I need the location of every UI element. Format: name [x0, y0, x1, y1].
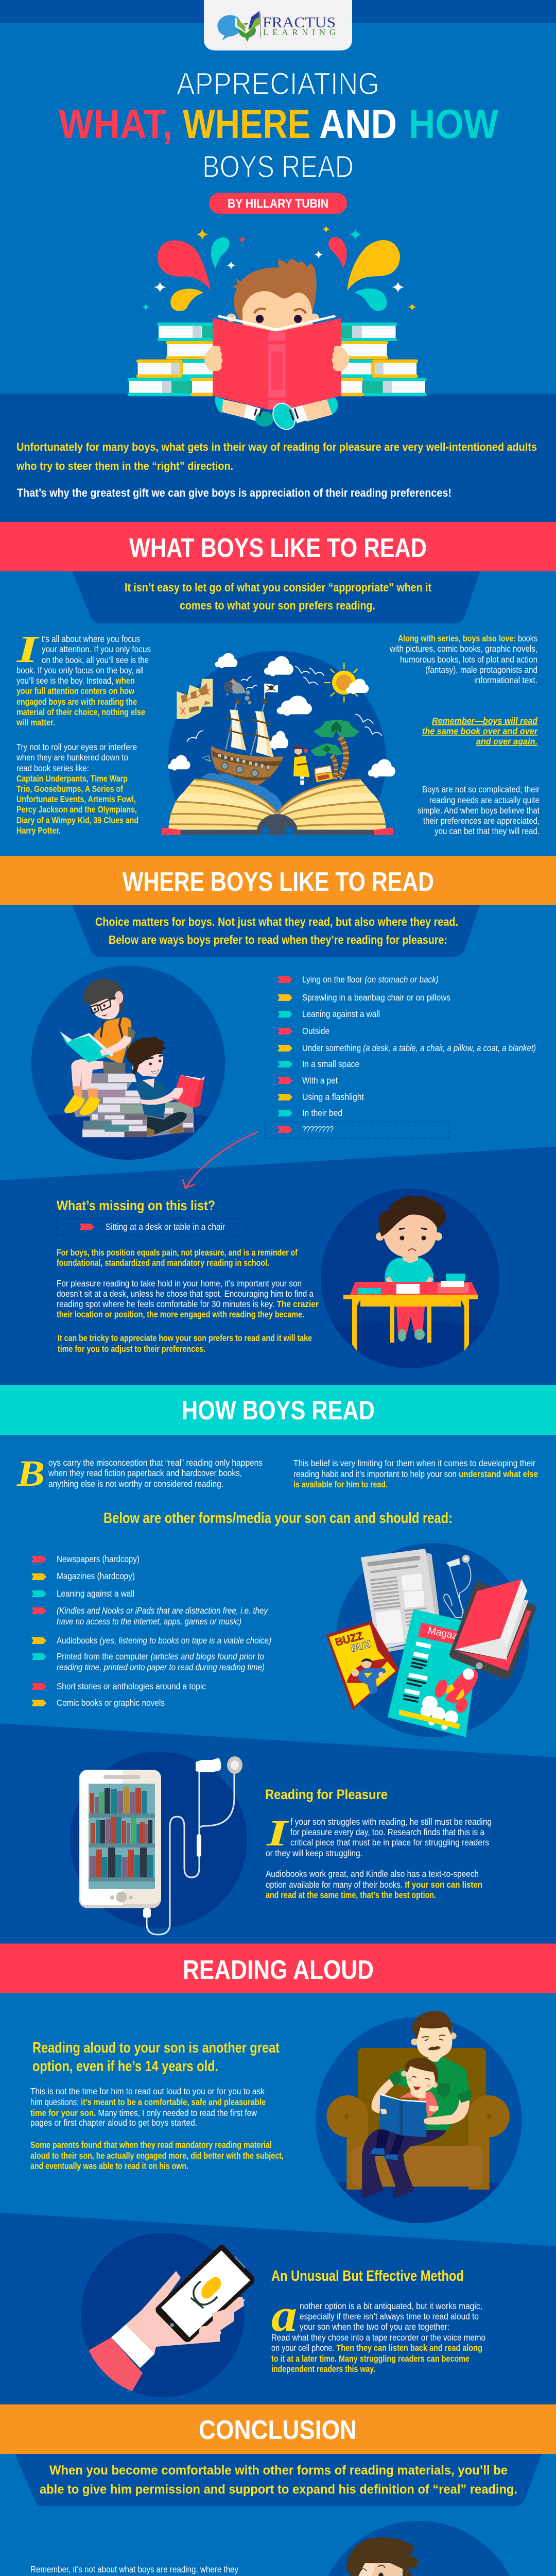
- text block: left column: your attention. If you only focus: [42, 644, 151, 654]
- title: APPRECIATING: [177, 66, 379, 101]
- panel: where boys like to read: [0, 856, 556, 1399]
- title: [59, 66, 498, 184]
- text block: what's missing on this list: reading spot where he feels comfortable for 30 minutes is key. The crazier: [57, 1299, 319, 1309]
- subheading: Below are other forms/media your son can and should read:: [103, 1510, 453, 1527]
- callout: [15, 2454, 542, 2506]
- heading: where boys like to read: WHERE BOYS LIKE TO READ: [123, 867, 434, 897]
- text block: left column: Captain Underpants, Time Warp: [16, 773, 128, 784]
- list: forms of media: Comic books or graphic novels: [57, 1698, 165, 1708]
- heading: reading aloud: READING ALOUD: [183, 1955, 374, 1985]
- list: reading positions: Sprawling in a beanbag chair or on pillows: [302, 992, 450, 1003]
- text block: misconception: B: [16, 1453, 45, 1494]
- text block: reading for pleasure: I: [266, 1812, 290, 1854]
- text block: intro: That’s why the greatest gift we can give boys is appreciation of their reading preferences!: [17, 486, 451, 499]
- panel: what boys like to read: [0, 522, 556, 869]
- text block: conclusion: Remember, it’s not about what boys are reading, where they: [30, 2564, 238, 2574]
- callout: comes to what your son prefers reading.: [180, 599, 375, 612]
- list: forms of media: reading time, printed onto paper to read during reading time): [57, 1662, 265, 1672]
- panel: conclusion: [0, 2404, 556, 2576]
- text block: reading aloud: aloud to their son, he actually engaged more, did better with the subject,: [30, 2150, 284, 2161]
- illustration: unhappy boy at desk: [321, 1189, 499, 1368]
- illustration: newspaper, comic, magazine and tablet: [326, 1543, 536, 1737]
- text block: misconception: is available for him to read.: [293, 1479, 388, 1489]
- text block: reading for pleasure: for pleasure every day, too. Research finds that this is a: [290, 1827, 484, 1837]
- illustration: smartphone with earbuds and bookshelf: [70, 1752, 247, 1935]
- heading: conclusion: [0, 2404, 556, 2454]
- text block: right column: (fantasy), male protagonists and: [425, 665, 537, 675]
- text block: reading aloud: time for your son. Many times, I only needed to read the first few: [30, 2108, 257, 2118]
- text block: what's missing on this list: their location or position, the more engaged with reading they became.: [57, 1309, 304, 1319]
- text block: right column: reading needs are actually quite: [429, 795, 540, 805]
- text block: right column: Along with series, boys also love: books: [398, 633, 537, 643]
- text block: left column: Unfortunate Events, Artemis Fowl,: [16, 794, 136, 804]
- author pill: [209, 193, 347, 214]
- text block: left column: Try not to roll your eyes or interfere: [16, 742, 137, 752]
- text block: reading for pleasure: Audiobooks work great, and Kindle also has a text-to-speech: [266, 1869, 479, 1879]
- illustration: newspaper, comic, magazine and tablet: BUZZ: [334, 1630, 364, 1649]
- text block: unusual method: nother option is a bit antiquated, but it works magic,: [300, 2301, 482, 2311]
- title: WHAT,: [59, 101, 172, 147]
- heading: how boys read: [0, 1385, 556, 1435]
- text block: unusual method: on your cell phone. Then they can listen back and read along: [271, 2343, 482, 2353]
- text block: what's missing on this list: It can be tricky to appreciate how your son prefers to read and it will take: [58, 1333, 312, 1343]
- illustration: boy with big red book: [304, 2521, 526, 2576]
- text block: left column: Harry Potter.: [16, 825, 61, 836]
- text block: unusual method: a: [271, 2290, 297, 2341]
- text block: right column: and over again.: [476, 736, 537, 747]
- text block: reading for pleasure: Reading for Pleasure: [265, 1787, 388, 1802]
- illustration: hand holding phone: [81, 2233, 254, 2401]
- text block: misconception: anything else is not worthy or considered reading.: [48, 1479, 223, 1489]
- panel: reading aloud: [0, 1943, 556, 2404]
- logo card: FRACTUS: [263, 14, 336, 31]
- callout: [72, 571, 480, 623]
- callout: When you become comfortable with other forms of reading materials, you’ll be: [49, 2463, 508, 2478]
- text block: left column: read book series like:: [16, 763, 89, 773]
- text block: left column: t’s all about where you focus: [42, 634, 140, 644]
- panel: how boys read: [0, 1385, 556, 1943]
- heading: how boys read: HOW BOYS READ: [182, 1396, 375, 1426]
- text block: misconception: [16, 1453, 538, 1494]
- text block: what's missing on this list: time for you to adjust to their preferences.: [58, 1344, 205, 1354]
- list: forms of media: have no access to the internet, apps, games or music): [57, 1616, 241, 1626]
- author pill: BY HILLARY TUBIN: [228, 197, 328, 211]
- illustration: newspaper, comic, magazine and tablet: Magaz: [427, 1625, 458, 1642]
- text block: left column: Percy Jackson and the Olympians,: [16, 804, 137, 815]
- text block: right column: informational text.: [474, 675, 537, 685]
- list: reading positions: With a pet: [302, 1075, 338, 1086]
- panel: intro header: [0, 0, 556, 522]
- text block: unusual method: independent readers this way.: [271, 2364, 375, 2374]
- text block: reading for pleasure: critical piece that must be in place for struggling readers: [290, 1837, 489, 1848]
- list: reading positions: In their bed: [302, 1108, 342, 1118]
- text block: left column: Trio, Goosebumps, A Series of: [16, 784, 123, 794]
- title: WHERE: [183, 101, 310, 147]
- text block: unusual method: especially if there isn’t always time to read aloud to: [300, 2311, 479, 2321]
- logo card: LEARNING: [263, 27, 336, 37]
- text block: left column: I: [16, 629, 40, 671]
- text block: reading for pleasure: and read at the same time, that’s the best option.: [266, 1890, 436, 1900]
- callout: It isn’t easy to let go of what you consider “appropriate” when it: [125, 581, 431, 594]
- diagonal background: [0, 1723, 556, 1943]
- text block: left column: book. If you only focus on the boy, all: [16, 665, 144, 675]
- callout: Choice matters for boys. Not just what they read, but also where they read.: [95, 915, 458, 928]
- text block: left column: engaged boys are with reading the: [16, 697, 137, 707]
- list: forms of media: Newspapers (hardcopy): [57, 1554, 140, 1564]
- text block: reading for pleasure: or they will keep struggling.: [266, 1848, 362, 1858]
- title: HOW: [409, 101, 498, 147]
- text block: left column: [16, 629, 151, 836]
- callout: [72, 905, 480, 957]
- text block: right column: their preferences are appreciated,: [423, 816, 540, 826]
- diagonal background: [0, 1147, 556, 1385]
- text block: what's missing on this list: For pleasure reading to take hold in your home, it’s important your son: [57, 1278, 302, 1289]
- text block: unusual method: [271, 2268, 485, 2374]
- callout: Below are ways boys prefer to read when they’re reading for pleasure:: [109, 933, 447, 946]
- list: forms of media: Printed from the computer (articles and blogs found prior to: [57, 1651, 264, 1662]
- list: forms of media: Magazines (hardcopy): [57, 1571, 135, 1581]
- text block: what's missing on this list: doesn’t sit at a desk, unless he chose that spot. Encouraging him to find a: [57, 1289, 314, 1299]
- heading: what boys like to read: [0, 522, 556, 571]
- list: forms of media: Leaning against a wall: [57, 1588, 134, 1599]
- list: reading positions: [265, 974, 536, 1139]
- text block: intro: who try to steer them in the “right” direction.: [16, 460, 233, 472]
- list: forms of media: Short stories or anthologies around a topic: [57, 1681, 206, 1691]
- list: forms of media: [31, 1554, 271, 1708]
- heading: where boys like to read: [0, 856, 556, 905]
- text block: reading aloud: pages or first chapter aloud to get boys started.: [30, 2117, 197, 2128]
- list: reading positions: Using a flashlight: [302, 1092, 364, 1102]
- text block: right column: you can bet that they will read.: [435, 826, 540, 836]
- list: reading positions: Outside: [302, 1026, 329, 1036]
- list: reading positions: Lying on the floor (on stomach or back): [302, 974, 439, 985]
- text block: left column: your full attention centers on how: [16, 686, 134, 696]
- text block: right column: simple. And when boys believe that: [418, 805, 540, 816]
- text block: misconception: when they read fiction paperback and hardcover books,: [48, 1468, 242, 1478]
- text block: unusual method: your son when the two of you are together:: [300, 2321, 449, 2332]
- text block: left column: when they are hunkered down to: [16, 752, 128, 762]
- heading: conclusion: CONCLUSION: [199, 2415, 357, 2445]
- text block: reading for pleasure: [265, 1787, 492, 1900]
- text block: right column: Boys are not so complicated; their: [422, 784, 540, 794]
- text block: what's missing on this list: [57, 1198, 319, 1354]
- text block: right column: Remember—boys will read: [432, 716, 537, 726]
- text block: left column: will matter.: [16, 717, 55, 727]
- text block: reading aloud: and eventually was able to read it on his own.: [30, 2161, 188, 2171]
- illustration: newspaper, comic, magazine and tablet: BUZ: [350, 1639, 372, 1654]
- arrow: to what's missing: [183, 1132, 258, 1188]
- text block: left column: Diary of a Wimpy Kid, 39 Clues and: [16, 815, 138, 825]
- title: BOYS READ: [202, 149, 354, 184]
- text block: reading for pleasure: f your son struggles with reading, he still must be reading: [290, 1817, 492, 1827]
- text block: misconception: reading habit and it’s important to help your son understand what else: [293, 1469, 538, 1479]
- text block: intro: [16, 440, 537, 499]
- list: reading positions: In a small space: [302, 1059, 359, 1069]
- text block: reading aloud: option, even if he’s 14 years old.: [32, 2058, 218, 2075]
- illustration: pirate ship on open book: [162, 651, 395, 869]
- callout: able to give him permission and support to expand his definition of “real” reading.: [40, 2482, 517, 2497]
- text block: left column: you’ll see is the boy. Instead, when: [16, 675, 135, 686]
- logo card: [204, 0, 352, 50]
- title: AND: [319, 101, 397, 147]
- heading: reading aloud: [0, 1943, 556, 1993]
- text block: what's missing on this list: Sitting at a desk or table in a chair: [106, 1222, 225, 1232]
- text block: unusual method: Read what they chose into a tape recorder or the voice memo: [271, 2332, 485, 2343]
- list: forms of media: Audiobooks (yes, listening to books on tape is a viable choice): [57, 1635, 271, 1646]
- text block: left column: on the book, all you’ll see is the: [42, 655, 149, 665]
- text block: reading aloud: Reading aloud to your son is another great: [32, 2040, 280, 2056]
- list: forms of media: (Kindles and Nooks or iPads that are distraction free, i.e. they: [57, 1605, 268, 1616]
- illustration: father reading to son in armchair: [316, 2011, 522, 2223]
- text block: what's missing on this list: What’s missing on this list?: [57, 1198, 215, 1213]
- text block: reading aloud: This is not the time for him to read out loud to you or for you to ask: [30, 2086, 265, 2096]
- list: reading positions: ????????: [302, 1124, 334, 1134]
- diagonal background: [0, 2213, 556, 2404]
- heading: what boys like to read: WHAT BOYS LIKE TO READ: [129, 533, 427, 563]
- text block: what's missing on this list: foundational, standardized and mandatory reading in school.: [57, 1258, 269, 1268]
- text block: reading aloud: Some parents found that when they read mandatory reading material: [30, 2140, 272, 2150]
- illustration: two boys on book stack: [31, 965, 225, 1160]
- text block: reading aloud: [30, 2040, 284, 2171]
- text block: right column: the same book over and over: [422, 726, 538, 736]
- text block: misconception: oys carry the misconception that “real” reading only happens: [48, 1458, 263, 1468]
- text block: reading aloud: him questions; it’s meant to be a comfortable, safe and pleasurable: [30, 2097, 266, 2107]
- text block: reading for pleasure: option available for many of their books. If your son can listen: [266, 1879, 482, 1890]
- text block: unusual method: to it at a later time. Many struggling readers can become: [271, 2353, 470, 2364]
- illustration: boy reading with book stacks: [128, 226, 427, 432]
- text block: what's missing on this list: For boys, this position equals pain, not pleasure, and is a reminder of: [57, 1247, 298, 1258]
- text block: unusual method: An Unusual But Effective Method: [271, 2268, 464, 2284]
- text block: left column: material of their choice, nothing else: [16, 707, 145, 717]
- text block: right column: [389, 633, 540, 836]
- text block: right column: with pictures, comic books, graphic novels,: [389, 643, 537, 654]
- list: reading positions: Leaning against a wall: [302, 1009, 380, 1019]
- text block: right column: humorous books, lots of plot and action: [400, 654, 537, 665]
